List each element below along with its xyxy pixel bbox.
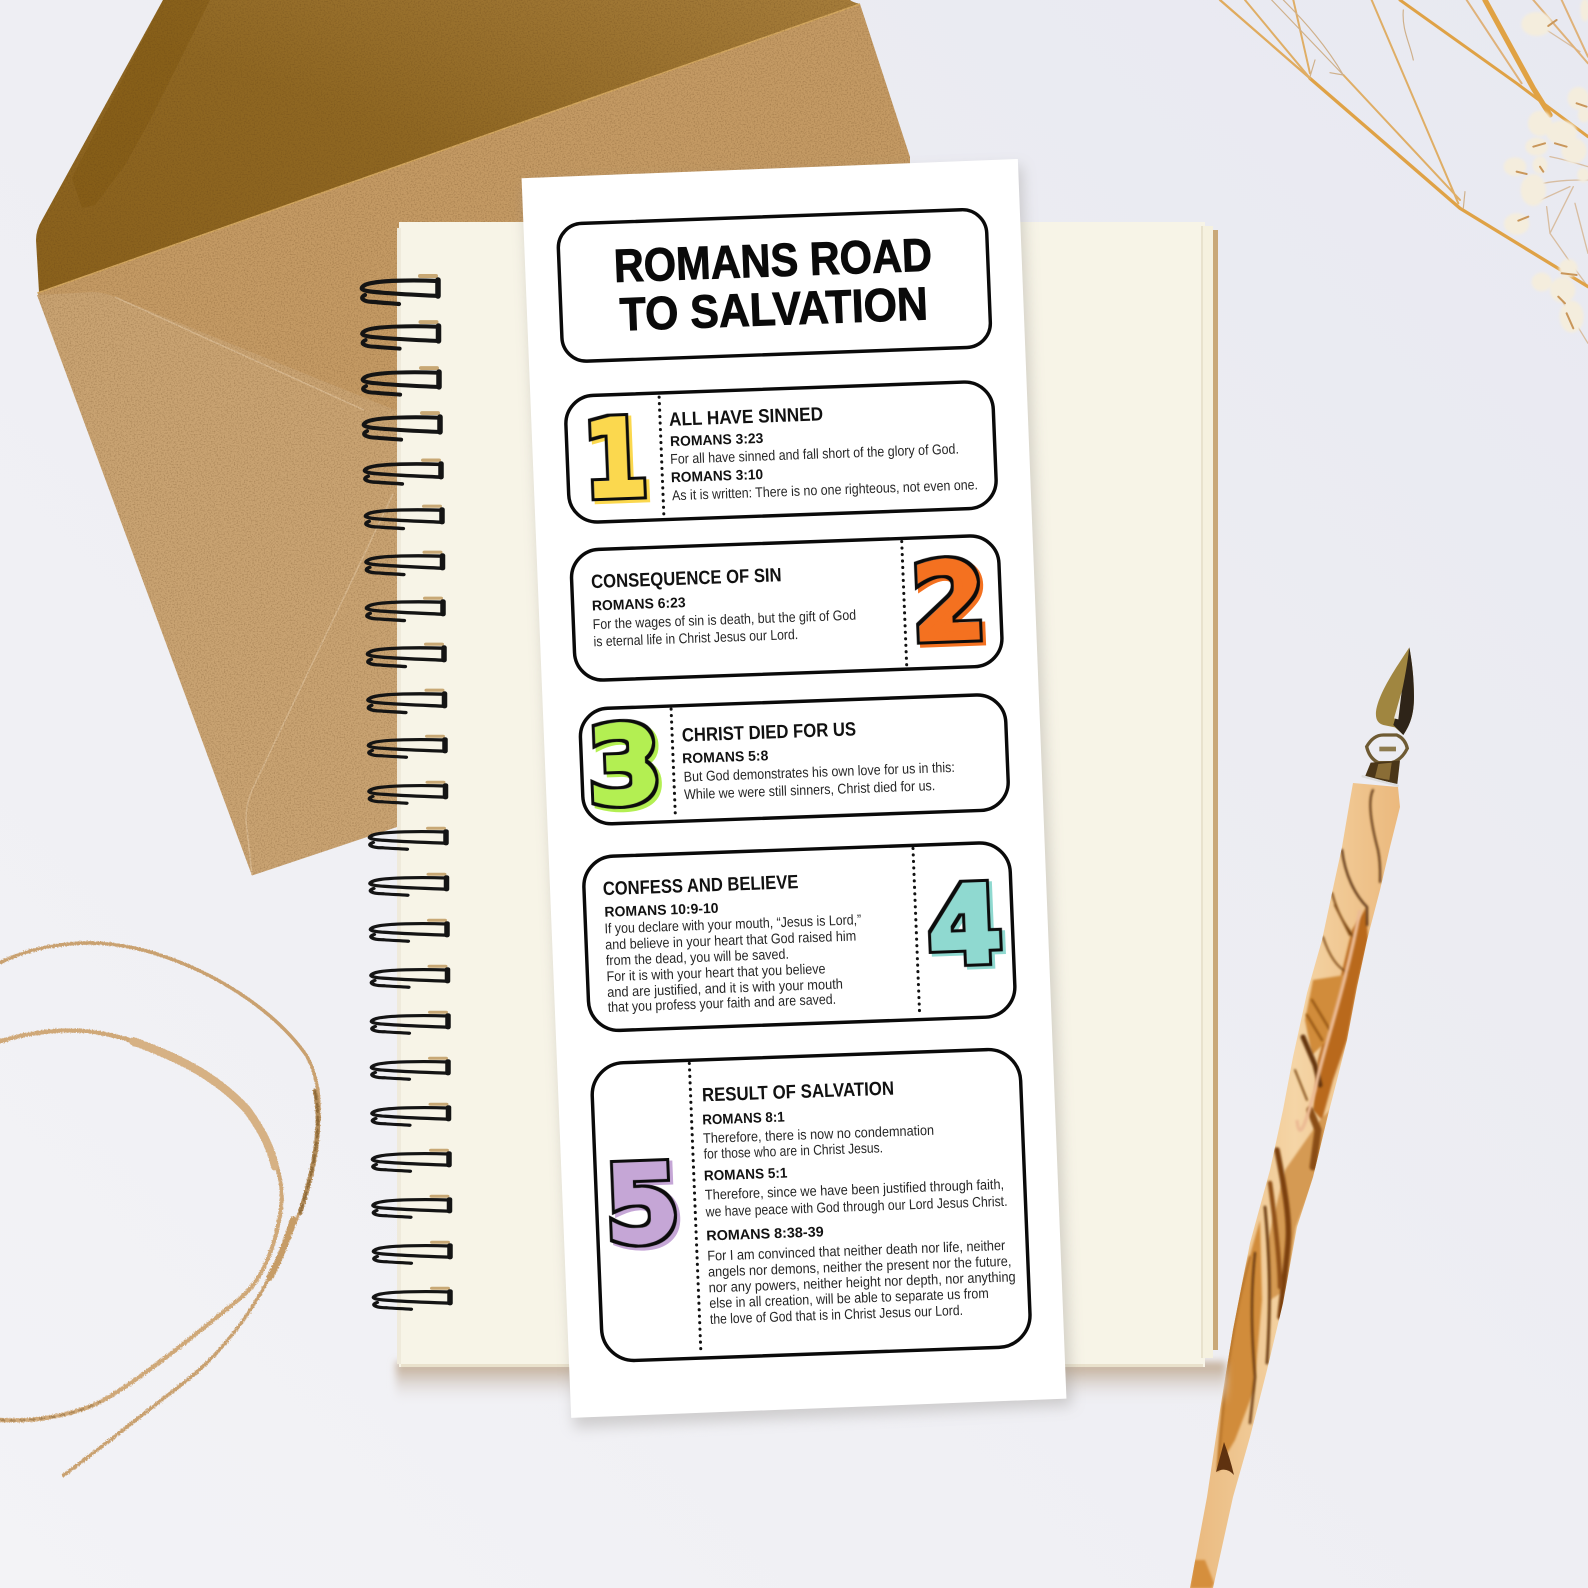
bookmark card bbox=[522, 159, 1066, 1418]
verses: romans 3: ROMANS 3:10 bbox=[671, 467, 764, 486]
verse: romans 6:23: is eternal life in Christ Jesus our Lord. bbox=[593, 627, 798, 650]
verse: romans 8:38-39: angels nor demons, neither the present nor the future, bbox=[708, 1254, 1012, 1281]
panel: step 2 consequence of sin bbox=[570, 535, 1003, 682]
verse: romans 8:1: ROMANS 8:1 bbox=[702, 1109, 785, 1128]
number 1: 1 bbox=[584, 399, 654, 526]
number 4: 4 bbox=[925, 862, 1005, 989]
verse: romans 6:23: For the wages of sin is death, but the gift of God bbox=[592, 608, 856, 633]
number 5: 5 bbox=[602, 1141, 682, 1269]
verse: romans 5:8: ROMANS 5:8 bbox=[682, 748, 769, 767]
number 3: 3 bbox=[588, 706, 668, 833]
heading: confess and believe: CONFESS AND BELIEVE bbox=[602, 872, 799, 900]
verse: romans 10:9-10: and are justified, and it is with your mouth bbox=[607, 977, 843, 1001]
verse: romans 8:38-39: else in all creation, will be able to separate us from bbox=[709, 1286, 989, 1312]
card paper bbox=[522, 159, 1066, 1418]
bookmark card shadow bbox=[524, 166, 1072, 1428]
card content bbox=[557, 209, 1031, 1362]
verses: romans 3: For all have sinned and fall short of the glory of God. bbox=[670, 442, 959, 468]
number 2: 2 bbox=[909, 539, 989, 666]
panel: step 4 confess and believe bbox=[583, 842, 1016, 1031]
pen nib bbox=[1362, 647, 1414, 786]
panel: step 1 all have sinned bbox=[565, 381, 997, 527]
heading: all have sinned: ALL HAVE SINNED bbox=[669, 404, 824, 431]
twine loop bbox=[0, 943, 319, 1475]
verses: romans 3: As it is written: There is no one righteous, not even one. bbox=[672, 477, 978, 504]
verse: romans 10:9-10: and believe in your heart that God raised him bbox=[605, 929, 856, 954]
title text: ROMANS ROAD bbox=[613, 229, 933, 292]
verse: romans 10:9-10: If you declare with your mouth, “Jesus is Lord,” bbox=[604, 912, 862, 937]
number 1: 1 bbox=[581, 396, 650, 523]
verse: romans 8:1 bbox=[702, 1104, 935, 1163]
verse: romans 8:38-39: For I am convinced that neither death nor life, neither bbox=[707, 1238, 1006, 1265]
notebook bbox=[397, 222, 1218, 1367]
envelope back flap bbox=[38, 4, 910, 875]
panel: step 5 result of salvation bbox=[591, 1048, 1031, 1362]
panel: step 3 christ died for us bbox=[579, 690, 1010, 834]
verse: romans 10:9-10: ROMANS 10:9-10 bbox=[604, 901, 719, 921]
number 3: 3 bbox=[585, 703, 665, 830]
verse: romans 8:1: Therefore, there is now no condemnation bbox=[703, 1123, 934, 1147]
spiral binding bbox=[362, 276, 450, 1309]
heading: christ died for us: CHRIST DIED FOR US bbox=[681, 719, 857, 747]
verse: romans 8:38-39 bbox=[706, 1217, 1017, 1328]
envelope inner dark bbox=[36, 0, 860, 292]
verse: romans 10:9-10: that you profess your faith and are saved. bbox=[607, 992, 836, 1016]
verse: romans 10:9-10: For it is with your heart that you believe bbox=[606, 961, 826, 985]
pen bbox=[1180, 647, 1414, 1588]
dried flower branch bbox=[1220, 0, 1588, 343]
title text bbox=[613, 229, 935, 341]
verse: romans 5:8 bbox=[682, 742, 956, 803]
heading: result of salvation: RESULT OF SALVATION bbox=[702, 1079, 894, 1106]
verse: romans 5:1: Therefore, since we have been justified through faith, bbox=[705, 1177, 1004, 1204]
title text: TO SALVATION bbox=[619, 277, 929, 341]
notebook shadow bbox=[396, 1362, 1226, 1404]
heading: consequence of sin: CONSEQUENCE OF SIN bbox=[591, 565, 782, 593]
verse: romans 8:1: for those who are in Christ Jesus. bbox=[703, 1140, 883, 1163]
verse: romans 10:9-10 bbox=[604, 896, 865, 1016]
verse: romans 6:23 bbox=[592, 589, 857, 650]
verse: romans 8:38-39: nor any powers, neither height nor depth, nor anything bbox=[708, 1269, 1016, 1296]
pen barrel bbox=[1180, 780, 1410, 1588]
verse: romans 5:1 bbox=[703, 1158, 1008, 1221]
verse: romans 5:8: While we were still sinners, Christ died for us. bbox=[684, 778, 936, 803]
number 4: 4 bbox=[928, 865, 1008, 992]
envelope bbox=[36, 0, 910, 876]
verse: romans 5:8: But God demonstrates his own love for us in this: bbox=[683, 760, 955, 786]
verse: romans 5:1: ROMANS 5:1 bbox=[704, 1165, 788, 1184]
verses: romans 3 bbox=[669, 423, 978, 504]
number 5: 5 bbox=[606, 1144, 685, 1272]
number 2: 2 bbox=[912, 542, 992, 669]
verse: romans 10:9-10: from the dead, you will be saved. bbox=[606, 947, 789, 969]
verse: romans 5:1: we have peace with God through our Lord Jesus Christ. bbox=[705, 1194, 1008, 1221]
verse: romans 8:38-39: ROMANS 8:38-39 bbox=[706, 1224, 824, 1245]
verses: romans 3: ROMANS 3:23 bbox=[670, 431, 764, 450]
title panel bbox=[557, 209, 991, 362]
envelope front flap bbox=[37, 292, 400, 876]
verse: romans 8:38-39: the love of God that is in Christ Jesus our Lord. bbox=[710, 1303, 963, 1328]
verse: romans 6:23: ROMANS 6:23 bbox=[592, 595, 686, 614]
